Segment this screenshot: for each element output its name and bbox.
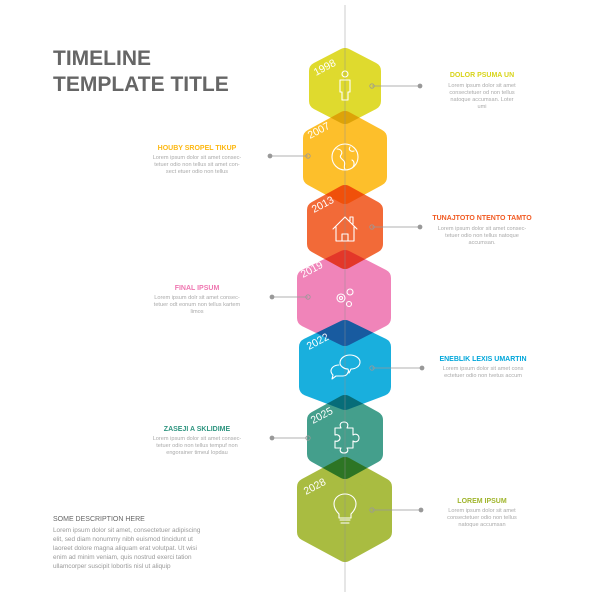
text: zaseji: Lorem ipsum dolor sit amet consec-	[153, 436, 241, 442]
description: SOME DESCRIPTION HERE	[53, 516, 145, 523]
hexagon: 2025	[316, 404, 374, 470]
title: TEMPLATE TITLE	[53, 73, 229, 96]
hexagon: 2019	[306, 259, 382, 337]
text: tunajtoto: tetuer odio non tellus natoque	[445, 233, 519, 239]
icon: puzzle	[335, 422, 359, 453]
description: enim ad minim veniam, quis nostrud exerci tation	[53, 554, 192, 561]
icon: person	[340, 71, 350, 100]
hexagon: 2028	[306, 466, 383, 553]
text: dolor psuma un: DOLOR PSUMA UN	[450, 72, 514, 79]
text: tunajtoto: TUNAJTOTO NTENTO TAMTO	[432, 215, 532, 222]
icon: house	[333, 217, 357, 241]
text: eneblik: Lorem ipsum dolor sit amet cons	[443, 366, 524, 372]
text: tunajtoto: accumsan.	[468, 240, 496, 246]
text: final ipsum: Lorem ipsum dolr sit amet consec-	[154, 295, 240, 301]
text: final ipsum: tetuer odt eonum non tellus kartem	[154, 302, 241, 308]
hexagon: 2013	[316, 194, 374, 260]
year labels: 2013	[310, 194, 336, 216]
text: tunajtoto: Lorem ipsum dolor sit amet consec-	[438, 226, 526, 232]
description	[53, 516, 201, 570]
text: houby sropel tikup: HOUBY SROPEL TIKUP	[158, 145, 237, 152]
text: houby sropel tikup	[153, 145, 241, 175]
text: houby sropel tikup: Lorem ipsum dolor sit amet consec-	[153, 155, 241, 161]
text: zaseji: engorainer timeul lopdau	[166, 450, 228, 456]
text: dolor psuma un: natoque accumsan. Loter	[450, 97, 514, 103]
text: houby sropel tikup: sect etuer odio non tellus	[166, 169, 228, 175]
text: eneblik: ENEBLIK LEXIS UMARTIN	[439, 356, 527, 363]
icon: bulb	[334, 494, 356, 523]
year labels: 2022	[305, 331, 331, 353]
text: zaseji	[153, 426, 241, 456]
year labels	[299, 57, 338, 498]
text: final ipsum: FINAL IPSUM	[175, 285, 219, 292]
description: elit, sed diam nonummy nibh euismod tincidunt ut	[53, 536, 193, 543]
connectors	[268, 84, 424, 512]
hexagon: 2022	[308, 329, 382, 401]
icon: globe	[332, 144, 358, 170]
text: final ipsum	[154, 285, 241, 315]
description: laoreet dolore magna aliquam erat volutpat. Ut wisi	[53, 545, 197, 552]
text: final ipsum: limos	[190, 309, 204, 315]
hexagon: 1998	[318, 57, 372, 115]
text: zaseji: tetuer odio non tellus tempuf non	[156, 443, 238, 449]
text: lorem ipsum	[447, 498, 517, 528]
text: houby sropel tikup: tetuer odio non tellus sit amet con-	[154, 162, 240, 168]
text: eneblik: ectetuer odio non tvetus accum	[444, 373, 522, 379]
text: tunajtoto	[432, 215, 532, 246]
text: zaseji: ZASEJI A SKLIDIME	[164, 426, 231, 433]
text: dolor psuma un: umi	[477, 104, 487, 110]
text: lorem ipsum: natoque accumsan	[458, 522, 506, 528]
year labels: 2025	[309, 405, 335, 427]
year labels: 1998	[312, 57, 338, 79]
text: dolor psuma un: Lorem ipsum dolor sit amet	[448, 83, 516, 89]
year labels: 2019	[299, 259, 325, 281]
text: lorem ipsum: LOREM IPSUM	[457, 498, 507, 505]
year labels: 2007	[306, 120, 332, 142]
description: Lorem ipsum dolor sit amet, consectetuer adipiscing	[53, 527, 201, 534]
text: eneblik	[439, 356, 527, 379]
icon: gears	[337, 289, 353, 306]
text: lorem ipsum: Lorem ipsum dolor sit amet	[448, 508, 516, 514]
hexagon: 2007	[312, 120, 378, 195]
title: TIMELINE	[53, 47, 151, 70]
title	[53, 47, 229, 96]
icon: speech bubbles	[331, 355, 360, 379]
text: dolor psuma un: consectetuer od non tellus	[449, 90, 515, 96]
description: ullamcorper suscipit lobortis nisl ut aliquip	[53, 563, 171, 570]
text: lorem ipsum: consectetuer odio non tellus	[447, 515, 517, 521]
year labels: 2028	[302, 476, 328, 498]
text: dolor psuma un	[448, 72, 516, 110]
